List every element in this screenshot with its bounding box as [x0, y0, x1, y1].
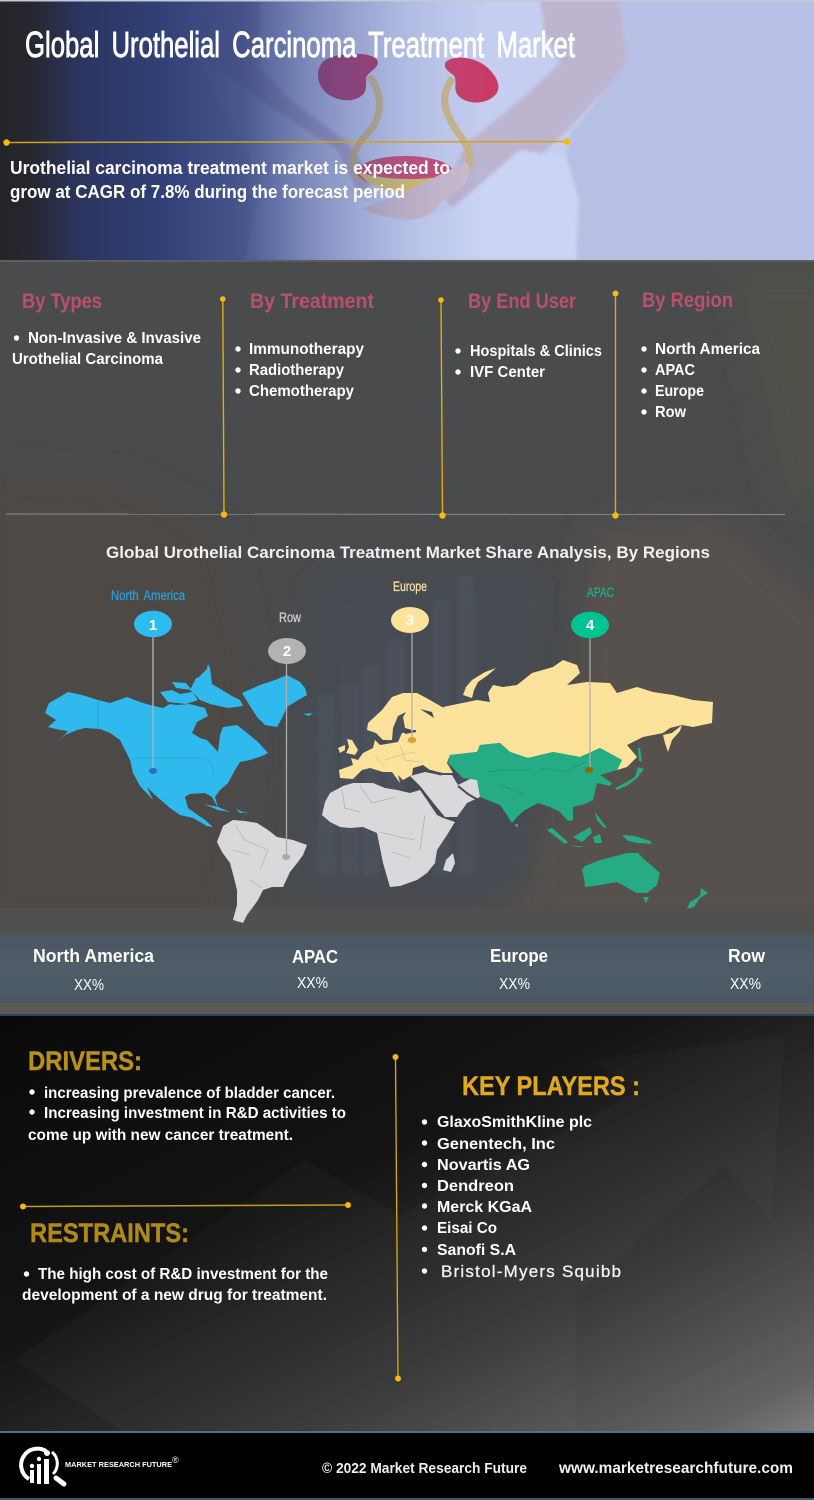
icon: bladder	[357, 156, 453, 194]
heading: key players: KEY PLAYERS :	[462, 1071, 640, 1101]
text: restraints: The high cost of R&D investment for the	[38, 1266, 328, 1283]
stat: europe	[490, 946, 548, 993]
text: key players: Bristol-Myers Squibb	[441, 1262, 621, 1281]
text: copyright: © 2022 Market Research Future	[322, 1460, 527, 1477]
heading: by treatment: By Treatment	[250, 290, 374, 313]
stat: row: Row	[728, 946, 766, 966]
list: regions: Europe	[655, 383, 704, 400]
divider: vertical gold rule	[392, 1054, 401, 1382]
heading: by region: By Region	[642, 289, 733, 312]
heading: by end user: By End User	[468, 290, 576, 313]
text: drivers: Increasing investment in R&D activities to	[44, 1105, 346, 1122]
heading: map section: Global Urothelial Carcinoma Treatment Market Share Analysis, By Regions	[106, 543, 710, 562]
pin 1: north america: North America	[111, 587, 185, 603]
text: key players: Sanofi S.A	[437, 1242, 516, 1259]
panel: segmentation and map background	[0, 260, 814, 1015]
text: key players	[422, 1071, 640, 1281]
heading: drivers: DRIVERS:	[28, 1046, 142, 1076]
list: types: Non-Invasive & Invasive	[28, 330, 201, 347]
text: restraints	[22, 1218, 328, 1304]
pin 3: europe: Europe	[393, 578, 427, 594]
stat: europe: XX%	[499, 976, 530, 993]
logo: market research future: ®	[172, 1455, 179, 1465]
pin 3: europe: 3	[406, 612, 414, 629]
text: key players: GlaxoSmithKline plc	[437, 1114, 592, 1131]
illustration: hands	[362, 162, 470, 220]
text: key players: Dendreon	[437, 1178, 514, 1195]
panel: header banner	[0, 0, 814, 260]
list: treatments: Radiotherapy	[249, 362, 344, 379]
pin 3: europe	[391, 578, 429, 743]
list: end users: IVF Center	[470, 364, 545, 381]
stat: north america: North America	[33, 946, 155, 966]
decorative growth arrow	[15, 1035, 785, 1430]
text: drivers	[28, 1046, 346, 1144]
text: market growth summary: Urothelial carcinoma treatment market is expected to	[10, 158, 450, 178]
pin 2: rest of world: Row	[279, 609, 302, 625]
panel: by types	[12, 290, 201, 368]
list: end users	[455, 343, 602, 381]
pin 4: asia pacific: 4	[586, 617, 595, 634]
divider: restraints rule	[20, 1202, 351, 1210]
text: market growth summary	[10, 158, 450, 202]
heading: by types: By Types	[22, 290, 102, 313]
icon: left kidney	[318, 54, 378, 100]
heading: restraints: RESTRAINTS:	[30, 1218, 189, 1248]
text: key players: Novartis AG	[437, 1157, 530, 1174]
list: end users: Hospitals & Clinics	[470, 343, 602, 360]
pin 1: north america	[111, 587, 185, 774]
text: key players: Genentech, Inc	[437, 1136, 555, 1153]
list: treatments	[235, 341, 364, 400]
stat: apac: APAC	[292, 947, 338, 967]
list: regions	[641, 341, 760, 421]
decorative chart bars	[318, 575, 474, 875]
pin 2: rest of world	[268, 609, 306, 860]
panel: regional share strip	[0, 934, 814, 1016]
pin 4: asia pacific	[571, 584, 614, 773]
icon: right kidney	[445, 58, 498, 103]
stat: row	[728, 946, 766, 993]
list: treatments: Chemotherapy	[249, 383, 354, 400]
region: europe and russia	[338, 660, 713, 783]
illustration: woman with kidneys and bladder	[192, 0, 628, 260]
list: types: Urothelial Carcinoma	[12, 351, 163, 368]
list: regions: APAC	[655, 362, 695, 379]
logo: market research future	[21, 1449, 179, 1484]
text: drivers: come up with new cancer treatment.	[28, 1127, 293, 1144]
stat: apac: XX%	[297, 975, 328, 992]
list: types	[12, 330, 201, 368]
panel: footer	[0, 1431, 814, 1500]
list: regions: North America	[655, 341, 760, 358]
gold divider	[3, 138, 570, 146]
panel: by region	[641, 289, 760, 421]
stat: europe: Europe	[490, 946, 548, 966]
region: asia pacific	[448, 743, 708, 909]
text: market growth summary: grow at CAGR of 7.8% during the forecast period	[10, 182, 405, 202]
dark seas	[404, 709, 442, 776]
text: key players: Eisai Co	[437, 1220, 497, 1237]
region: rest of world	[217, 772, 480, 923]
pin 2: rest of world: 2	[283, 643, 291, 660]
title: Global Urothelial Carcinoma Treatment Market	[25, 24, 575, 65]
pin 4: asia pacific: APAC	[587, 584, 614, 600]
list: regions: Row	[655, 404, 687, 421]
world map	[45, 660, 713, 923]
panel: drivers, restraints, key players	[0, 1016, 814, 1431]
stat: apac	[292, 947, 338, 992]
stat: north america	[33, 946, 155, 994]
text: restraints: development of a new drug for treatment.	[22, 1287, 327, 1304]
panel: by treatment	[235, 290, 374, 400]
text: website: www.marketresearchfuture.com	[558, 1460, 793, 1477]
pin 1: north america: 1	[149, 617, 157, 634]
logo: market research future: MARKET RESEARCH FUTURE	[65, 1460, 172, 1469]
stat: row: XX%	[730, 976, 761, 993]
text: drivers: increasing prevalence of bladder cancer.	[44, 1085, 335, 1102]
stat: north america: XX%	[74, 977, 104, 994]
panel: by end user	[455, 290, 602, 381]
region: north america	[45, 664, 313, 827]
list: treatments: Immunotherapy	[249, 341, 364, 358]
text: key players: Merck KGaA	[437, 1199, 532, 1216]
icon: ureters	[353, 76, 470, 182]
